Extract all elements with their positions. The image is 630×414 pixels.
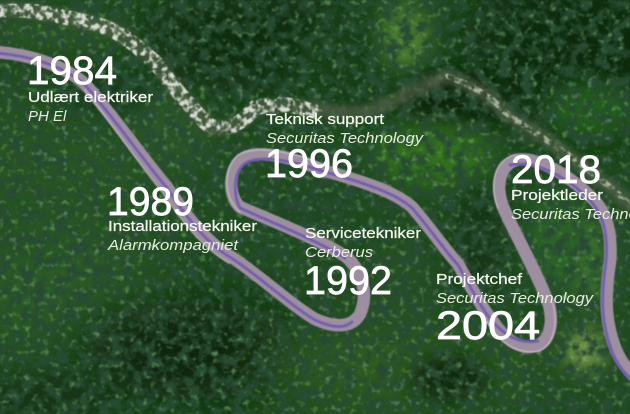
- milestone 1989: [107, 180, 257, 254]
- role: Teknisk support: [266, 111, 385, 128]
- company: Alarmkompagniet: [107, 237, 239, 254]
- year 1996: 1996: [265, 142, 353, 186]
- winding road: [0, 52, 630, 382]
- milestone 1984: [27, 49, 153, 125]
- pale lane line: [85, 90, 555, 352]
- year 1989: 1989: [107, 180, 194, 224]
- company: Securitas Technology: [266, 130, 425, 147]
- milestone 2004: [436, 271, 595, 348]
- milestone 2018: [511, 148, 630, 223]
- milestone 1992: [304, 225, 421, 303]
- year 2004: 2004: [436, 304, 540, 348]
- role: Udlært elektriker: [28, 89, 153, 106]
- year 1992: 1992: [304, 259, 392, 303]
- rocky stream: [0, 10, 630, 205]
- company: Cerberus: [305, 244, 374, 261]
- company: PH El: [28, 108, 67, 125]
- year 2018: 2018: [511, 148, 601, 192]
- company: Securitas Technology: [436, 290, 595, 307]
- purple lane line: [0, 53, 630, 382]
- road surface: [0, 52, 630, 378]
- role: Servicetekniker: [305, 225, 421, 242]
- role: Projektleder: [511, 187, 603, 204]
- role: Projektchef: [436, 271, 523, 288]
- role: Installationstekniker: [108, 218, 257, 235]
- year 1984: 1984: [27, 49, 117, 93]
- milestone 1996: [265, 111, 425, 186]
